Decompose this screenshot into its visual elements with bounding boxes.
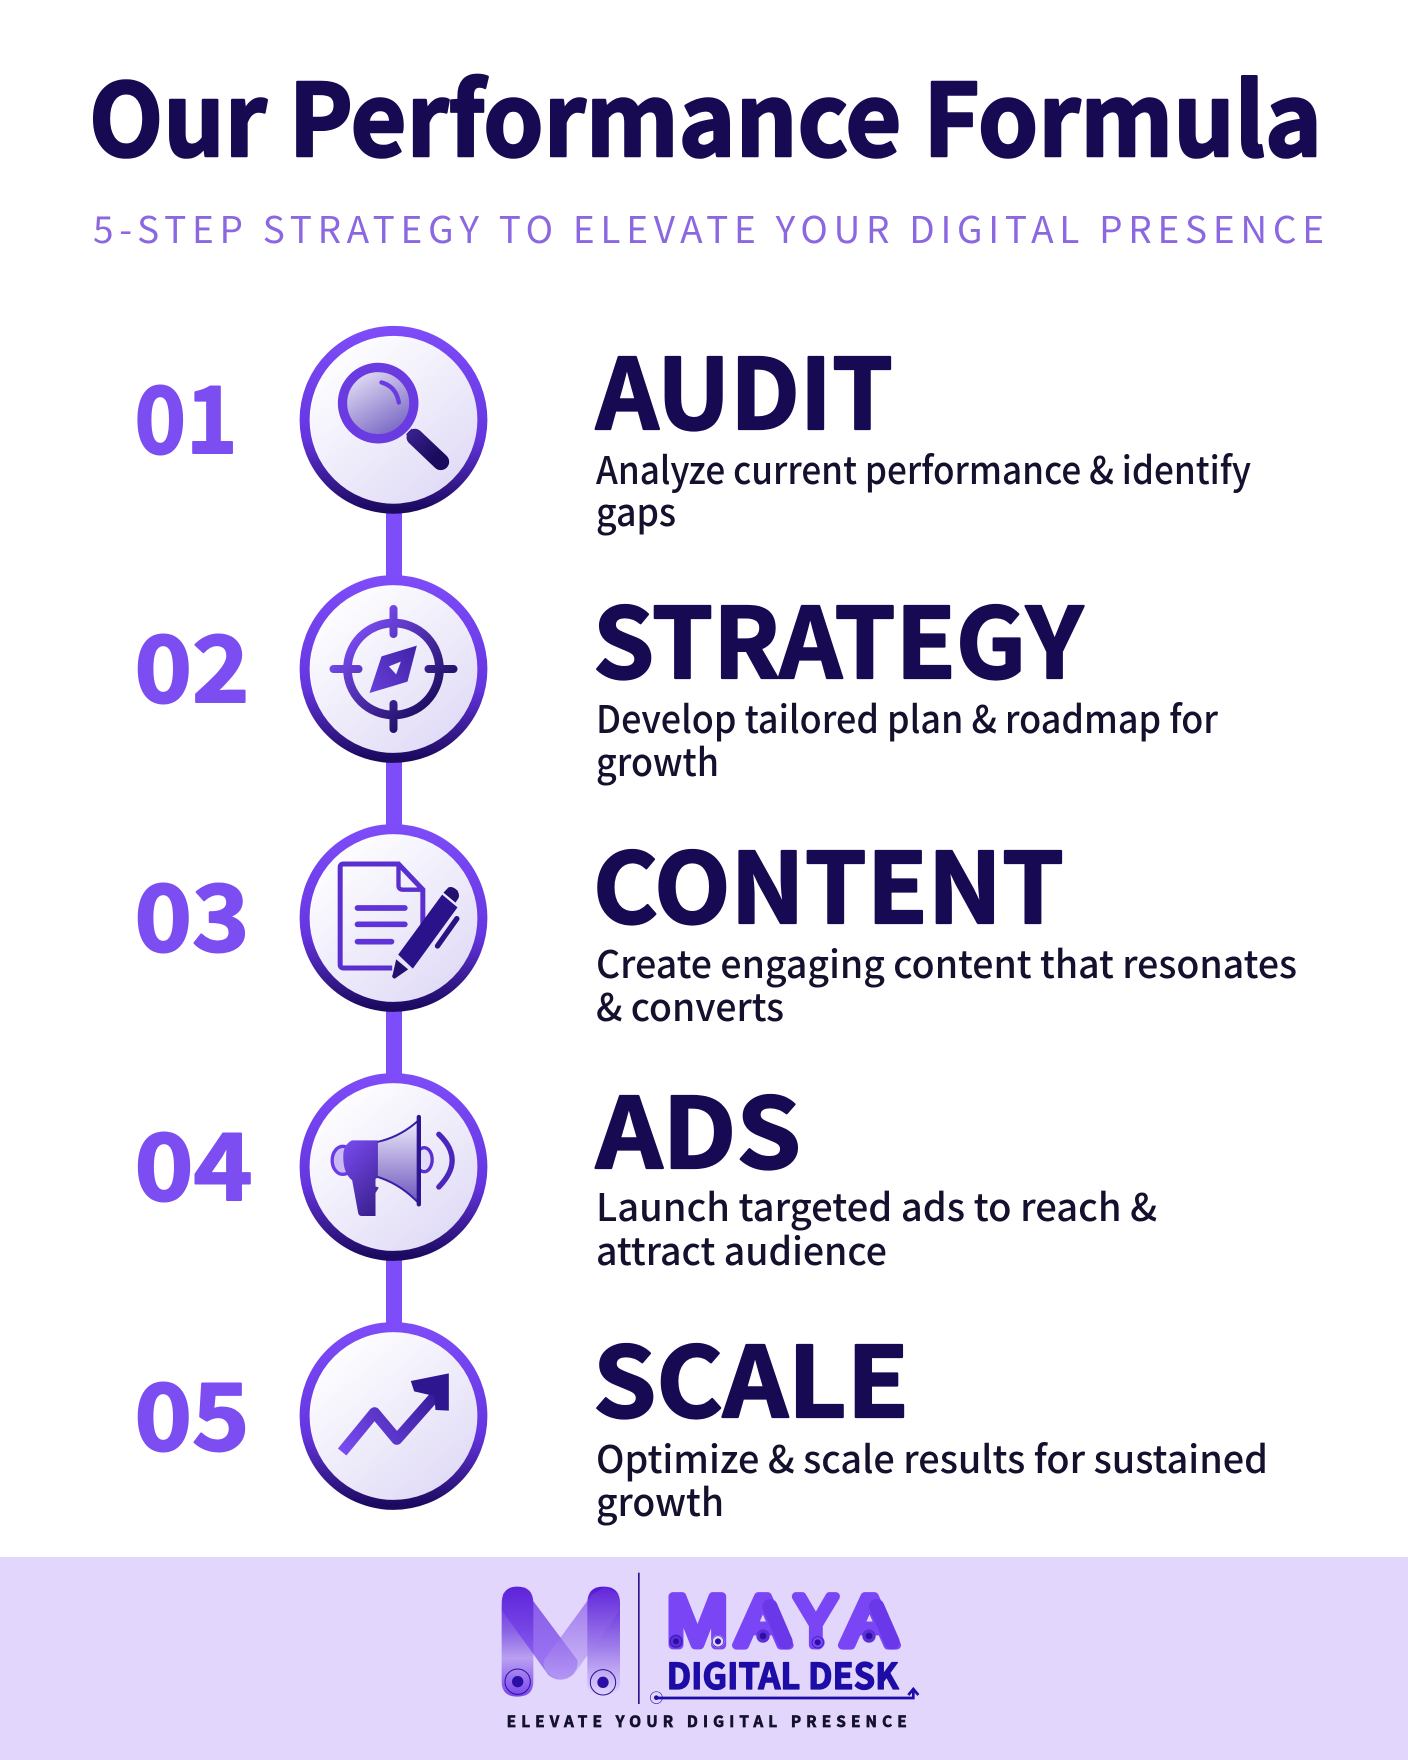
step 04 description: attract audience bbox=[596, 1221, 887, 1276]
step 04 heading: ADS bbox=[595, 1055, 801, 1196]
subtitle: 5-STEP STRATEGY TO ELEVATE YOUR DIGITAL PRESENCE bbox=[93, 200, 1324, 254]
step 02 description bbox=[596, 689, 1218, 787]
logo wordmark: Digital Desk: DIGITAL DESK bbox=[667, 1648, 899, 1700]
step 01 description: Analyze current performance & identify bbox=[596, 440, 1251, 495]
step 01 icon: magnifying glass bbox=[305, 331, 482, 509]
logo underline arrow bbox=[650, 1689, 918, 1704]
step 01 description bbox=[596, 440, 1251, 537]
step 05 icon: growth arrow bbox=[305, 1327, 482, 1505]
logo tagline: ELEVATE YOUR DIGITAL PRESENCE bbox=[507, 1710, 907, 1732]
step 03 description: Create engaging content that resonates bbox=[596, 934, 1297, 989]
step 02 number: 02 bbox=[134, 596, 250, 729]
logo wordmark: MAYA: Y bbox=[794, 1581, 837, 1660]
step 02 icon: compass target bbox=[305, 580, 482, 758]
step 05 number: 05 bbox=[134, 1344, 250, 1477]
step 02 description: Develop tailored plan & roadmap for bbox=[596, 689, 1218, 744]
timeline connector bbox=[386, 500, 402, 1340]
logo mark: M monogram bbox=[502, 1587, 620, 1697]
step 02 description: growth bbox=[596, 732, 719, 787]
step 05 description: Optimize & scale results for sustained bbox=[596, 1429, 1268, 1484]
step 04 description bbox=[596, 1177, 1157, 1276]
logo wordmark: MAYA: M bbox=[667, 1581, 728, 1660]
step 03 description bbox=[596, 934, 1297, 1032]
step 01 heading: AUDIT bbox=[595, 316, 893, 457]
logo wordmark: MAYA: A bbox=[737, 1581, 789, 1660]
step 04 icon: megaphone bbox=[305, 1078, 482, 1256]
step 03 number: 03 bbox=[134, 845, 250, 978]
step 03 description: & converts bbox=[596, 977, 784, 1032]
step 05 description bbox=[596, 1429, 1268, 1527]
footer logo bbox=[502, 1573, 918, 1732]
logo wordmark: MAYA bbox=[667, 1581, 896, 1660]
title: Our Performance Formula bbox=[89, 40, 1322, 185]
step 01 description: gaps bbox=[596, 482, 676, 537]
step 04 number: 04 bbox=[134, 1094, 252, 1227]
step 05 description: growth bbox=[596, 1472, 724, 1527]
step 04 description: Launch targeted ads to reach & bbox=[596, 1177, 1157, 1232]
step 03 heading: CONTENT bbox=[593, 810, 1064, 951]
logo divider bbox=[638, 1573, 640, 1704]
step 01 number: 01 bbox=[134, 347, 238, 480]
footer band bbox=[0, 1557, 1408, 1760]
step 03 icon: document and pen bbox=[305, 829, 482, 1007]
step 02 heading: STRATEGY bbox=[593, 565, 1084, 706]
logo wordmark: MAYA: A bbox=[843, 1581, 896, 1660]
step 05 heading: SCALE bbox=[593, 1304, 909, 1445]
